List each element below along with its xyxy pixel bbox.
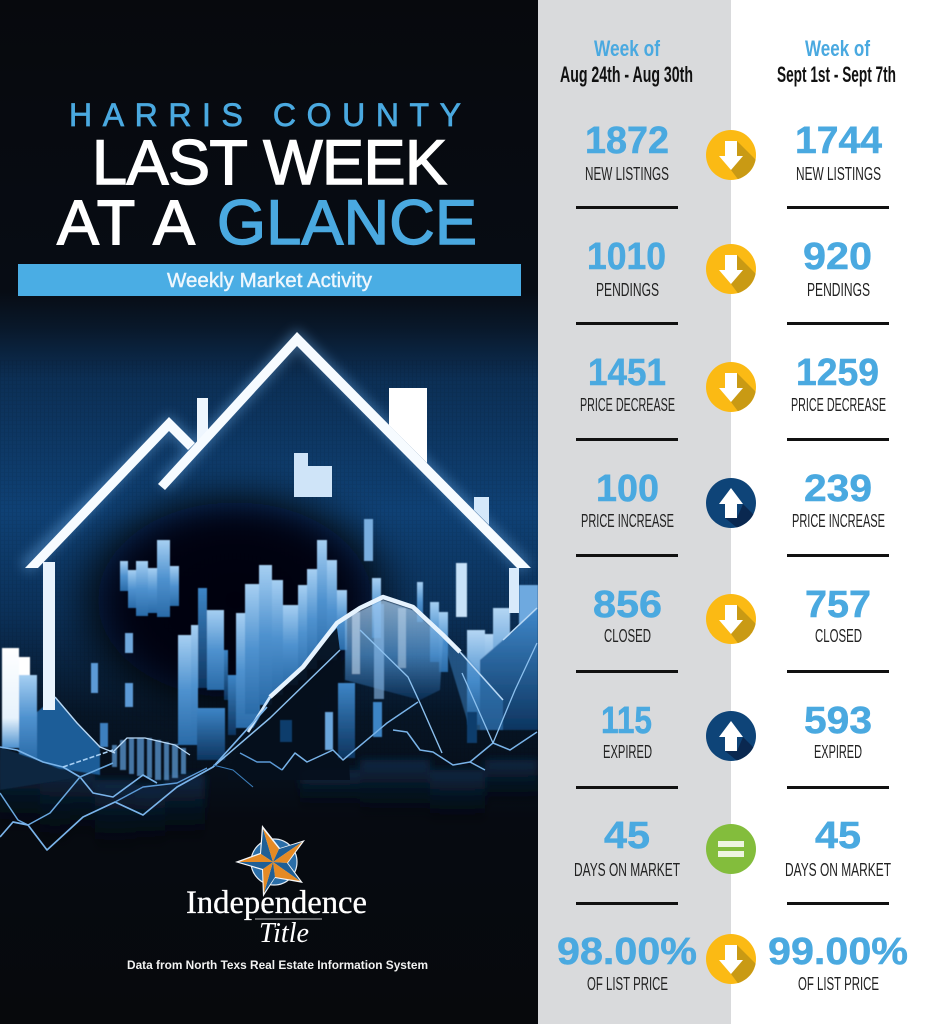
row: closed: CLOSED — [604, 625, 651, 646]
row: new listings: NEW LISTINGS — [585, 163, 669, 184]
icon: up arrow — [706, 711, 756, 761]
wordmark: Independence — [186, 885, 367, 921]
row: price decrease: 1259 — [796, 352, 879, 394]
chart lower bars — [280, 683, 477, 758]
row: price increase — [576, 468, 889, 557]
title line: Last Week: LAST WEEK — [92, 128, 447, 198]
row: pendings: PENDINGS — [807, 279, 870, 300]
logo: Independence Title — [186, 825, 367, 949]
row: expired — [576, 700, 889, 789]
header: current week: Week of — [805, 36, 871, 61]
row: percent of list price: OF LIST PRICE — [587, 973, 668, 994]
title line: Harris County: HARRIS COUNTY — [69, 97, 461, 133]
row: expired: 593 — [804, 700, 872, 742]
house window — [294, 453, 332, 497]
script word: Title — [259, 918, 309, 949]
icon: equal sign — [706, 824, 756, 874]
dark area under chart curve — [253, 628, 350, 780]
row: expired: 115 — [601, 700, 652, 742]
row: pendings: 920 — [803, 236, 872, 278]
icon: up arrow — [706, 478, 756, 528]
header: current week — [777, 36, 896, 87]
row: price increase: PRICE INCREASE — [581, 510, 674, 531]
fading drips below chart — [0, 757, 538, 828]
header: previous week — [560, 36, 693, 87]
row: price decrease — [576, 352, 889, 441]
subtitle banner — [18, 264, 521, 296]
icon: star — [235, 825, 305, 897]
icon: down arrow — [706, 244, 756, 294]
header: previous week: Week of — [594, 36, 661, 61]
title line: At a Glance — [56, 199, 475, 246]
row: days on market: DAYS ON MARKET — [574, 859, 680, 880]
row: price decrease: 1451 — [588, 352, 666, 394]
title — [56, 102, 475, 246]
row: days on market: 45 — [815, 815, 861, 857]
row: new listings — [576, 120, 889, 209]
title line: At a Glance: AT A — [57, 188, 195, 258]
row: new listings: 1872 — [585, 120, 669, 162]
panel: gray column — [538, 0, 731, 1024]
title line: At a Glance: GLANCE — [217, 188, 477, 258]
row: percent of list price — [557, 931, 908, 994]
icon: down arrow — [706, 130, 756, 180]
row: expired: EXPIRED — [814, 741, 862, 762]
row: closed: 757 — [805, 584, 871, 626]
house outline — [25, 332, 531, 710]
row: pendings: 1010 — [587, 236, 666, 278]
icon: down arrow — [706, 934, 756, 984]
row: new listings: 1744 — [795, 120, 882, 162]
row: percent of list price: 99.00% — [768, 931, 908, 973]
header: previous week: Aug 24th - Aug 30th — [560, 62, 693, 87]
row: pendings — [576, 236, 889, 325]
row: days on market — [574, 815, 891, 905]
row: closed: CLOSED — [815, 625, 862, 646]
chart trend lines — [0, 597, 537, 850]
row: percent of list price: 98.00% — [557, 931, 697, 973]
row: new listings: NEW LISTINGS — [796, 163, 881, 184]
row: price increase: 239 — [804, 468, 872, 510]
chart skyline bars — [0, 519, 538, 790]
row: days on market: 45 — [604, 815, 650, 857]
icon: down arrow — [706, 594, 756, 644]
row: price increase: 100 — [596, 468, 659, 510]
row: percent of list price: OF LIST PRICE — [798, 973, 879, 994]
row: expired: EXPIRED — [603, 741, 652, 762]
source note: Data from North Texs Real Estate Information System — [127, 960, 428, 972]
icon: down arrow — [706, 362, 756, 412]
row: closed: 856 — [593, 584, 662, 626]
row: pendings: PENDINGS — [596, 279, 659, 300]
row: price decrease: PRICE DECREASE — [580, 394, 675, 415]
subtitle banner: Weekly Market Activity — [167, 270, 372, 292]
row: closed — [576, 584, 889, 673]
panel: dark left background — [0, 0, 538, 1024]
